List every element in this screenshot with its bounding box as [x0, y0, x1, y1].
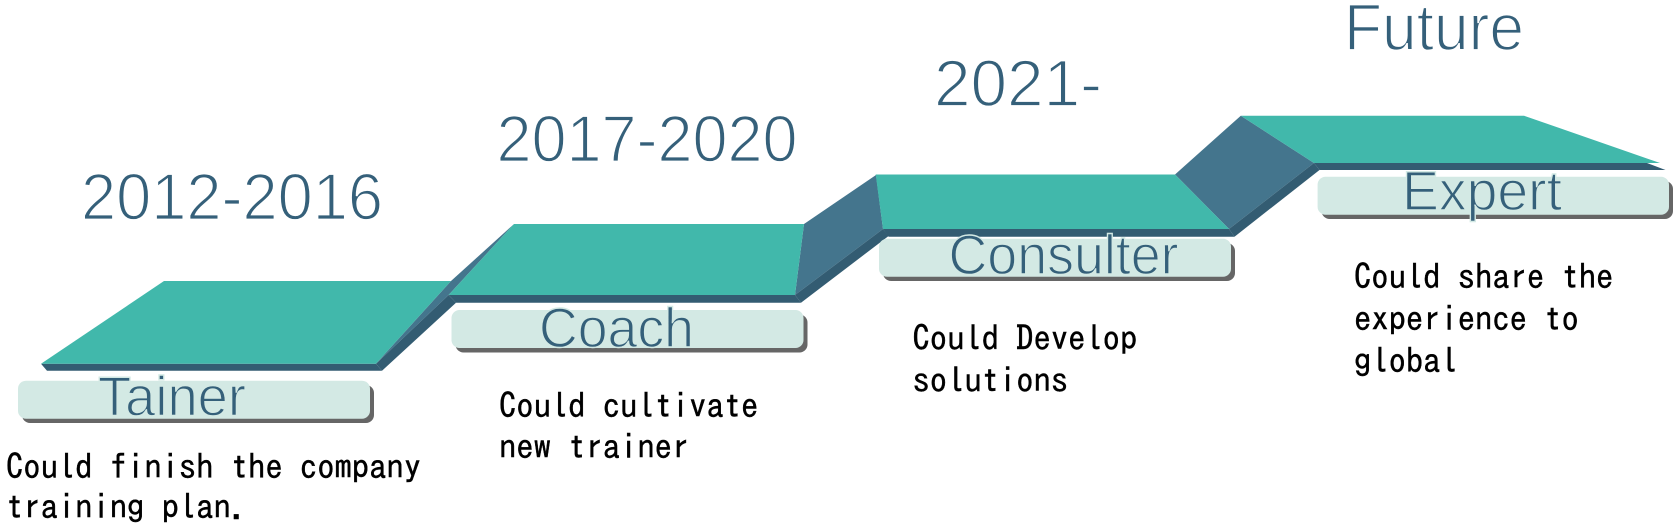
- description: Tainer: training plan.: [6, 490, 248, 524]
- description: Coach: new trainer: [499, 430, 689, 464]
- description: Expert: Could share the: [1354, 260, 1613, 294]
- description: Tainer: Could finish the company: [6, 450, 421, 484]
- description: Coach: Could cultivate: [499, 389, 758, 423]
- platform: step 2: [449, 224, 804, 303]
- label: Tainer: Tainer: [98, 365, 246, 428]
- description: Consulter: solutions: [912, 364, 1068, 398]
- platform: step 4: [1241, 116, 1666, 170]
- label: Expert: [1318, 159, 1673, 222]
- year: 2017-2020: 2017-2020: [496, 102, 798, 176]
- description: Consulter: Could Develop: [912, 322, 1137, 356]
- connector: step 3 to 4: [1175, 116, 1320, 237]
- year: 2021-: 2021-: [934, 46, 1102, 120]
- label: Expert: Expert: [1402, 159, 1562, 222]
- year: 2012-2016: 2012-2016: [81, 160, 383, 234]
- connector: step 1 to 2: [376, 224, 514, 371]
- description: Expert: experience to: [1354, 302, 1579, 336]
- description: Expert: global: [1354, 344, 1458, 378]
- label: Coach: Coach: [539, 296, 694, 359]
- label: Tainer: [18, 365, 374, 428]
- connector: step 2 to 3: [795, 175, 889, 303]
- label: Coach: [452, 296, 808, 359]
- label: Consulter: [879, 223, 1235, 286]
- platform: step 1: [41, 281, 451, 371]
- platform: step 3: [876, 174, 1234, 237]
- label: Consulter: Consulter: [948, 223, 1178, 286]
